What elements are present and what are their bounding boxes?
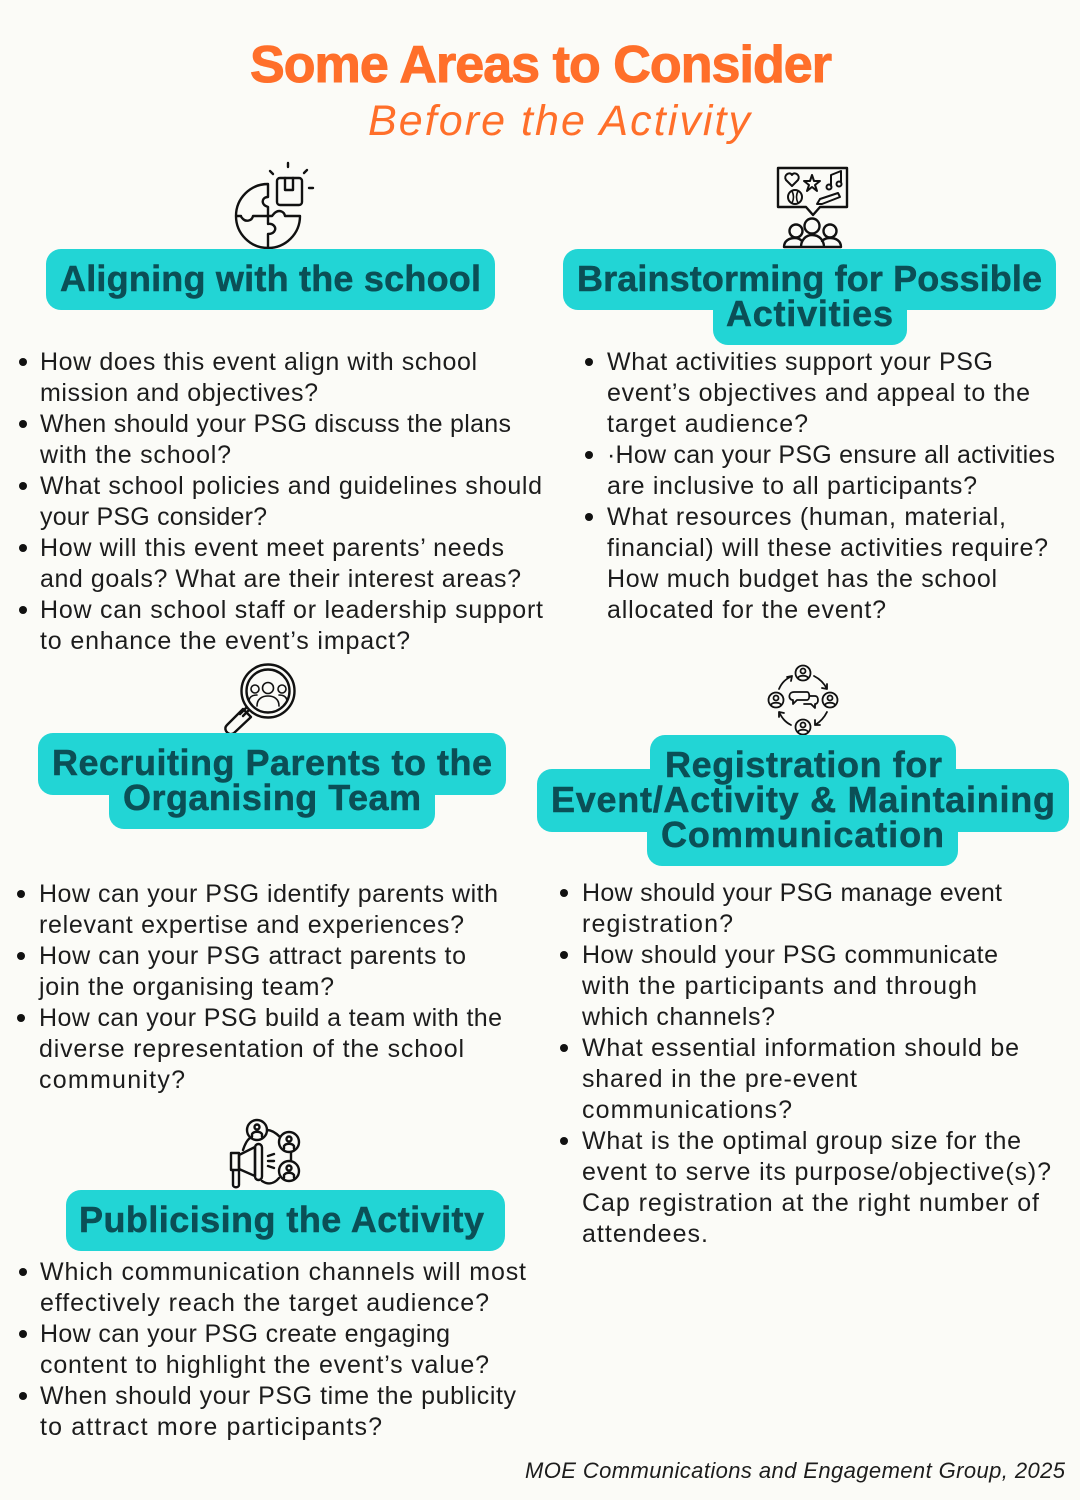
footer credit: MOE Communications and Engagement Group, 2025: [525, 1458, 1066, 1483]
list: aligning questions: with the school?: [39, 441, 231, 469]
panel: publicising: [19, 1120, 526, 1441]
icon: megaphone and people: [231, 1120, 299, 1187]
list: recruiting questions: [17, 880, 502, 1094]
list: publicising questions: effectively reach the target audience?: [40, 1289, 489, 1317]
subtitle: Before the Activity: [368, 97, 752, 145]
title: Some Areas to Consider: [250, 36, 832, 94]
heading: aligning: Aligning with the school: [60, 258, 481, 299]
heading: registration: Event/Activity & Maintaining: [551, 779, 1055, 820]
list: aligning questions: How does this event align with school: [40, 348, 477, 376]
list: publicising questions: How can your PSG create engaging: [40, 1320, 450, 1348]
list: registration questions: How should your PSG communicate: [582, 941, 998, 969]
list: publicising questions: Which communication channels will most: [40, 1258, 526, 1286]
list: recruiting questions: join the organising team?: [38, 973, 334, 1001]
list: aligning questions: How will this event meet parents’ needs: [40, 534, 504, 562]
panel: aligning with the school: [19, 163, 543, 655]
list: publicising questions: [19, 1258, 526, 1441]
list: brainstorming questions: What activities support your PSG: [607, 348, 993, 376]
list: brainstorming questions: How much budget has the school: [607, 565, 997, 593]
list: brainstorming questions: are inclusive to all participants?: [607, 472, 977, 500]
heading: aligning: [46, 249, 495, 310]
list: aligning questions: mission and objectives?: [40, 379, 318, 407]
list: registration questions: What essential information should be: [582, 1034, 1019, 1062]
heading: brainstorming: Brainstorming for Possible: [577, 258, 1042, 299]
heading: publicising: Publicising the Activity: [79, 1199, 484, 1240]
list: aligning questions: How can school staff or leadership support: [40, 596, 543, 624]
list: recruiting questions: How can your PSG attract parents to: [39, 942, 466, 970]
list: registration questions: communications?: [582, 1096, 792, 1124]
list: registration questions: How should your PSG manage event: [582, 879, 1002, 907]
heading: recruiting: [38, 733, 506, 829]
panel: registration and communication: [537, 666, 1069, 1248]
list: registration questions: Cap registration at the right number of: [582, 1189, 1039, 1217]
list: brainstorming questions: What resources (human, material,: [607, 503, 1006, 531]
heading: brainstorming: [563, 249, 1056, 345]
list: aligning questions: When should your PSG discuss the plans: [40, 410, 511, 438]
icon: speech bubble above people: [778, 168, 847, 247]
heading: registration: Registration for: [665, 744, 942, 785]
list: recruiting questions: community?: [39, 1066, 185, 1094]
list: brainstorming questions: event’s objectives and appeal to the: [607, 379, 1030, 407]
heading: publicising: [66, 1190, 505, 1251]
list: brainstorming questions: target audience?: [607, 410, 808, 438]
list: registration questions: [560, 879, 1051, 1248]
list: publicising questions: content to highlight the event’s value?: [40, 1351, 489, 1379]
list: registration questions: attendees.: [582, 1220, 708, 1248]
list: registration questions: which channels?: [581, 1003, 775, 1031]
list: publicising questions: When should your PSG time the publicity: [40, 1382, 516, 1410]
heading: recruiting: Organising Team: [123, 777, 421, 818]
list: aligning questions: [19, 348, 543, 655]
list: brainstorming questions: [585, 348, 1055, 624]
list: registration questions: registration?: [582, 910, 733, 938]
list: aligning questions: and goals? What are their interest areas?: [40, 565, 521, 593]
list: brainstorming questions: allocated for the event?: [607, 596, 886, 624]
list: recruiting questions: How can your PSG identify parents with: [39, 880, 498, 908]
list: registration questions: with the participants and through: [581, 972, 977, 1000]
list: registration questions: shared in the pre-event: [582, 1065, 857, 1093]
icon: people in communication cycle: [768, 666, 838, 734]
heading: recruiting: Recruiting Parents to the: [52, 742, 492, 783]
list: registration questions: What is the optimal group size for the: [582, 1127, 1021, 1155]
list: brainstorming questions: ·How can your PSG ensure all activities: [607, 441, 1055, 469]
heading: registration: [537, 735, 1069, 866]
list: recruiting questions: diverse representation of the school: [39, 1035, 464, 1063]
list: recruiting questions: relevant expertise and experiences?: [39, 911, 464, 939]
list: publicising questions: to attract more participants?: [40, 1413, 382, 1441]
heading: brainstorming: Activities: [726, 293, 893, 334]
icon: magnifier over people: [225, 664, 294, 734]
heading: registration: Communication: [661, 814, 944, 855]
list: aligning questions: your PSG consider?: [40, 503, 267, 531]
list: recruiting questions: How can your PSG build a team with the: [39, 1004, 502, 1032]
list: registration questions: event to serve its purpose/objective(s)?: [582, 1158, 1051, 1186]
list: aligning questions: to enhance the event’s impact?: [40, 627, 410, 655]
list: brainstorming questions: financial) will these activities require?: [607, 534, 1048, 562]
panel: recruiting parents: [17, 664, 506, 1094]
panel: brainstorming: [563, 168, 1056, 624]
list: aligning questions: What school policies and guidelines should: [40, 472, 542, 500]
icon: puzzle globe with box: [236, 163, 313, 248]
